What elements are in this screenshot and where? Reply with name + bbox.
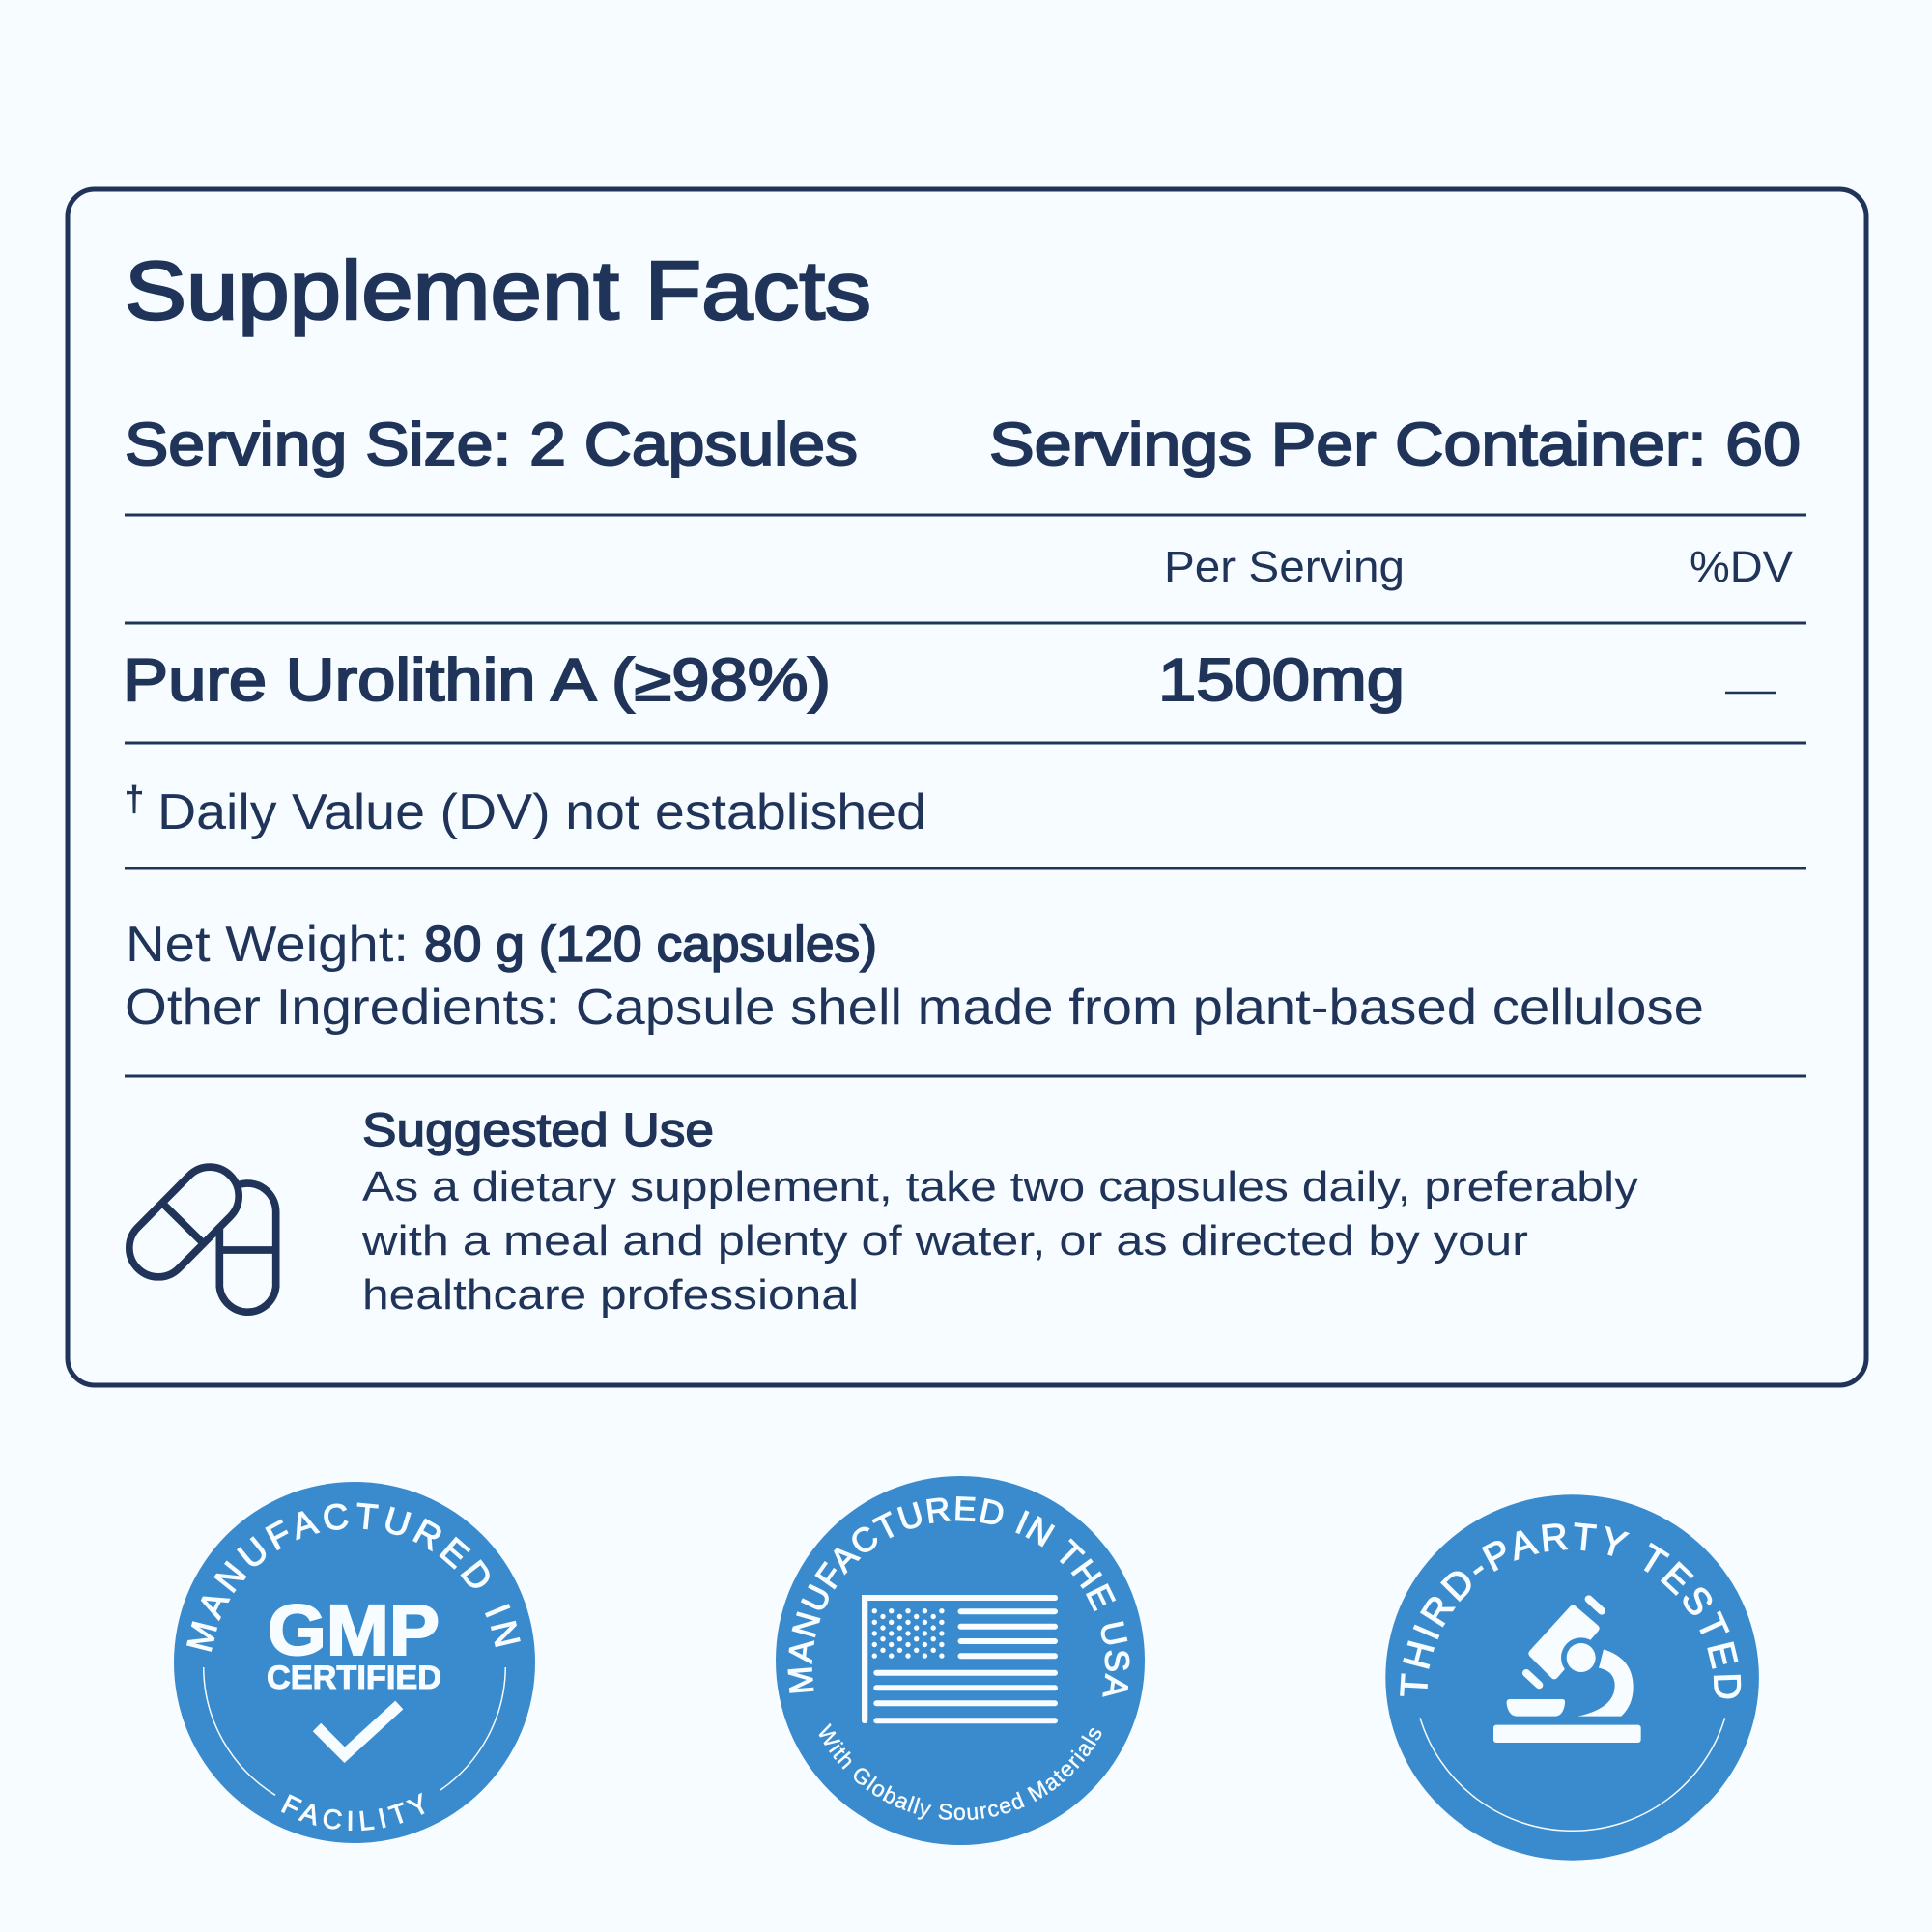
panel: supplement facts [68, 189, 1866, 1385]
badge: GMP certified [174, 1482, 535, 1843]
badge: third-party tested [1385, 1494, 1759, 1861]
net weight [126, 917, 877, 973]
icon: check mark [317, 1705, 399, 1755]
badge text: facility: FACILITY [280, 1793, 425, 1832]
serving size: Serving Size: 2 Capsules [125, 412, 858, 478]
badge text: third-party tested: THIRD-PARTY TESTED [1400, 1522, 1741, 1698]
icon: american flag [862, 1595, 1058, 1723]
servings per container: Servings Per Container: 60 [989, 412, 1801, 478]
daily value footnote: † [125, 779, 144, 818]
icon: capsules [129, 1167, 276, 1312]
ingredient amount: 1500mg [1158, 647, 1405, 714]
net weight: Net Weight: [126, 917, 409, 973]
column header: percent daily value: %DV [1690, 542, 1793, 591]
daily value dash [1725, 692, 1776, 694]
suggested use text [361, 1163, 1638, 1319]
suggested use text: healthcare professional [362, 1271, 859, 1319]
suggested use text: with a meal and plenty of water, or as directed by your [361, 1217, 1528, 1264]
suggested use text: As a dietary supplement, take two capsules daily, preferably [362, 1163, 1638, 1210]
net weight: 80 g (120 capsules) [424, 917, 877, 973]
title: Supplement Facts [125, 245, 871, 337]
badge: manufactured in the USA [776, 1476, 1145, 1845]
column header: per serving: Per Serving [1164, 542, 1405, 591]
suggested use heading: Suggested Use [362, 1105, 714, 1156]
other ingredients: Other Ingredients: Capsule shell made from plant-based cellulose [125, 980, 1704, 1036]
badge text: manufactured in the USA: MANUFACTURED IN THE USA [787, 1496, 1130, 1697]
badge text: globally sourced: With Globally Sourced Materials [819, 1723, 1101, 1820]
ingredient name: Pure Urolithin A (≥98%) [123, 647, 831, 714]
icon: microscope [1493, 1599, 1641, 1743]
badge text: GMP: GMP [268, 1590, 440, 1670]
daily value footnote: Daily Value (DV) not established [157, 784, 926, 840]
badge text: manufactured in: MANUFACTURED IN [185, 1503, 521, 1652]
badge text: certified: CERTIFIED [267, 1660, 441, 1696]
